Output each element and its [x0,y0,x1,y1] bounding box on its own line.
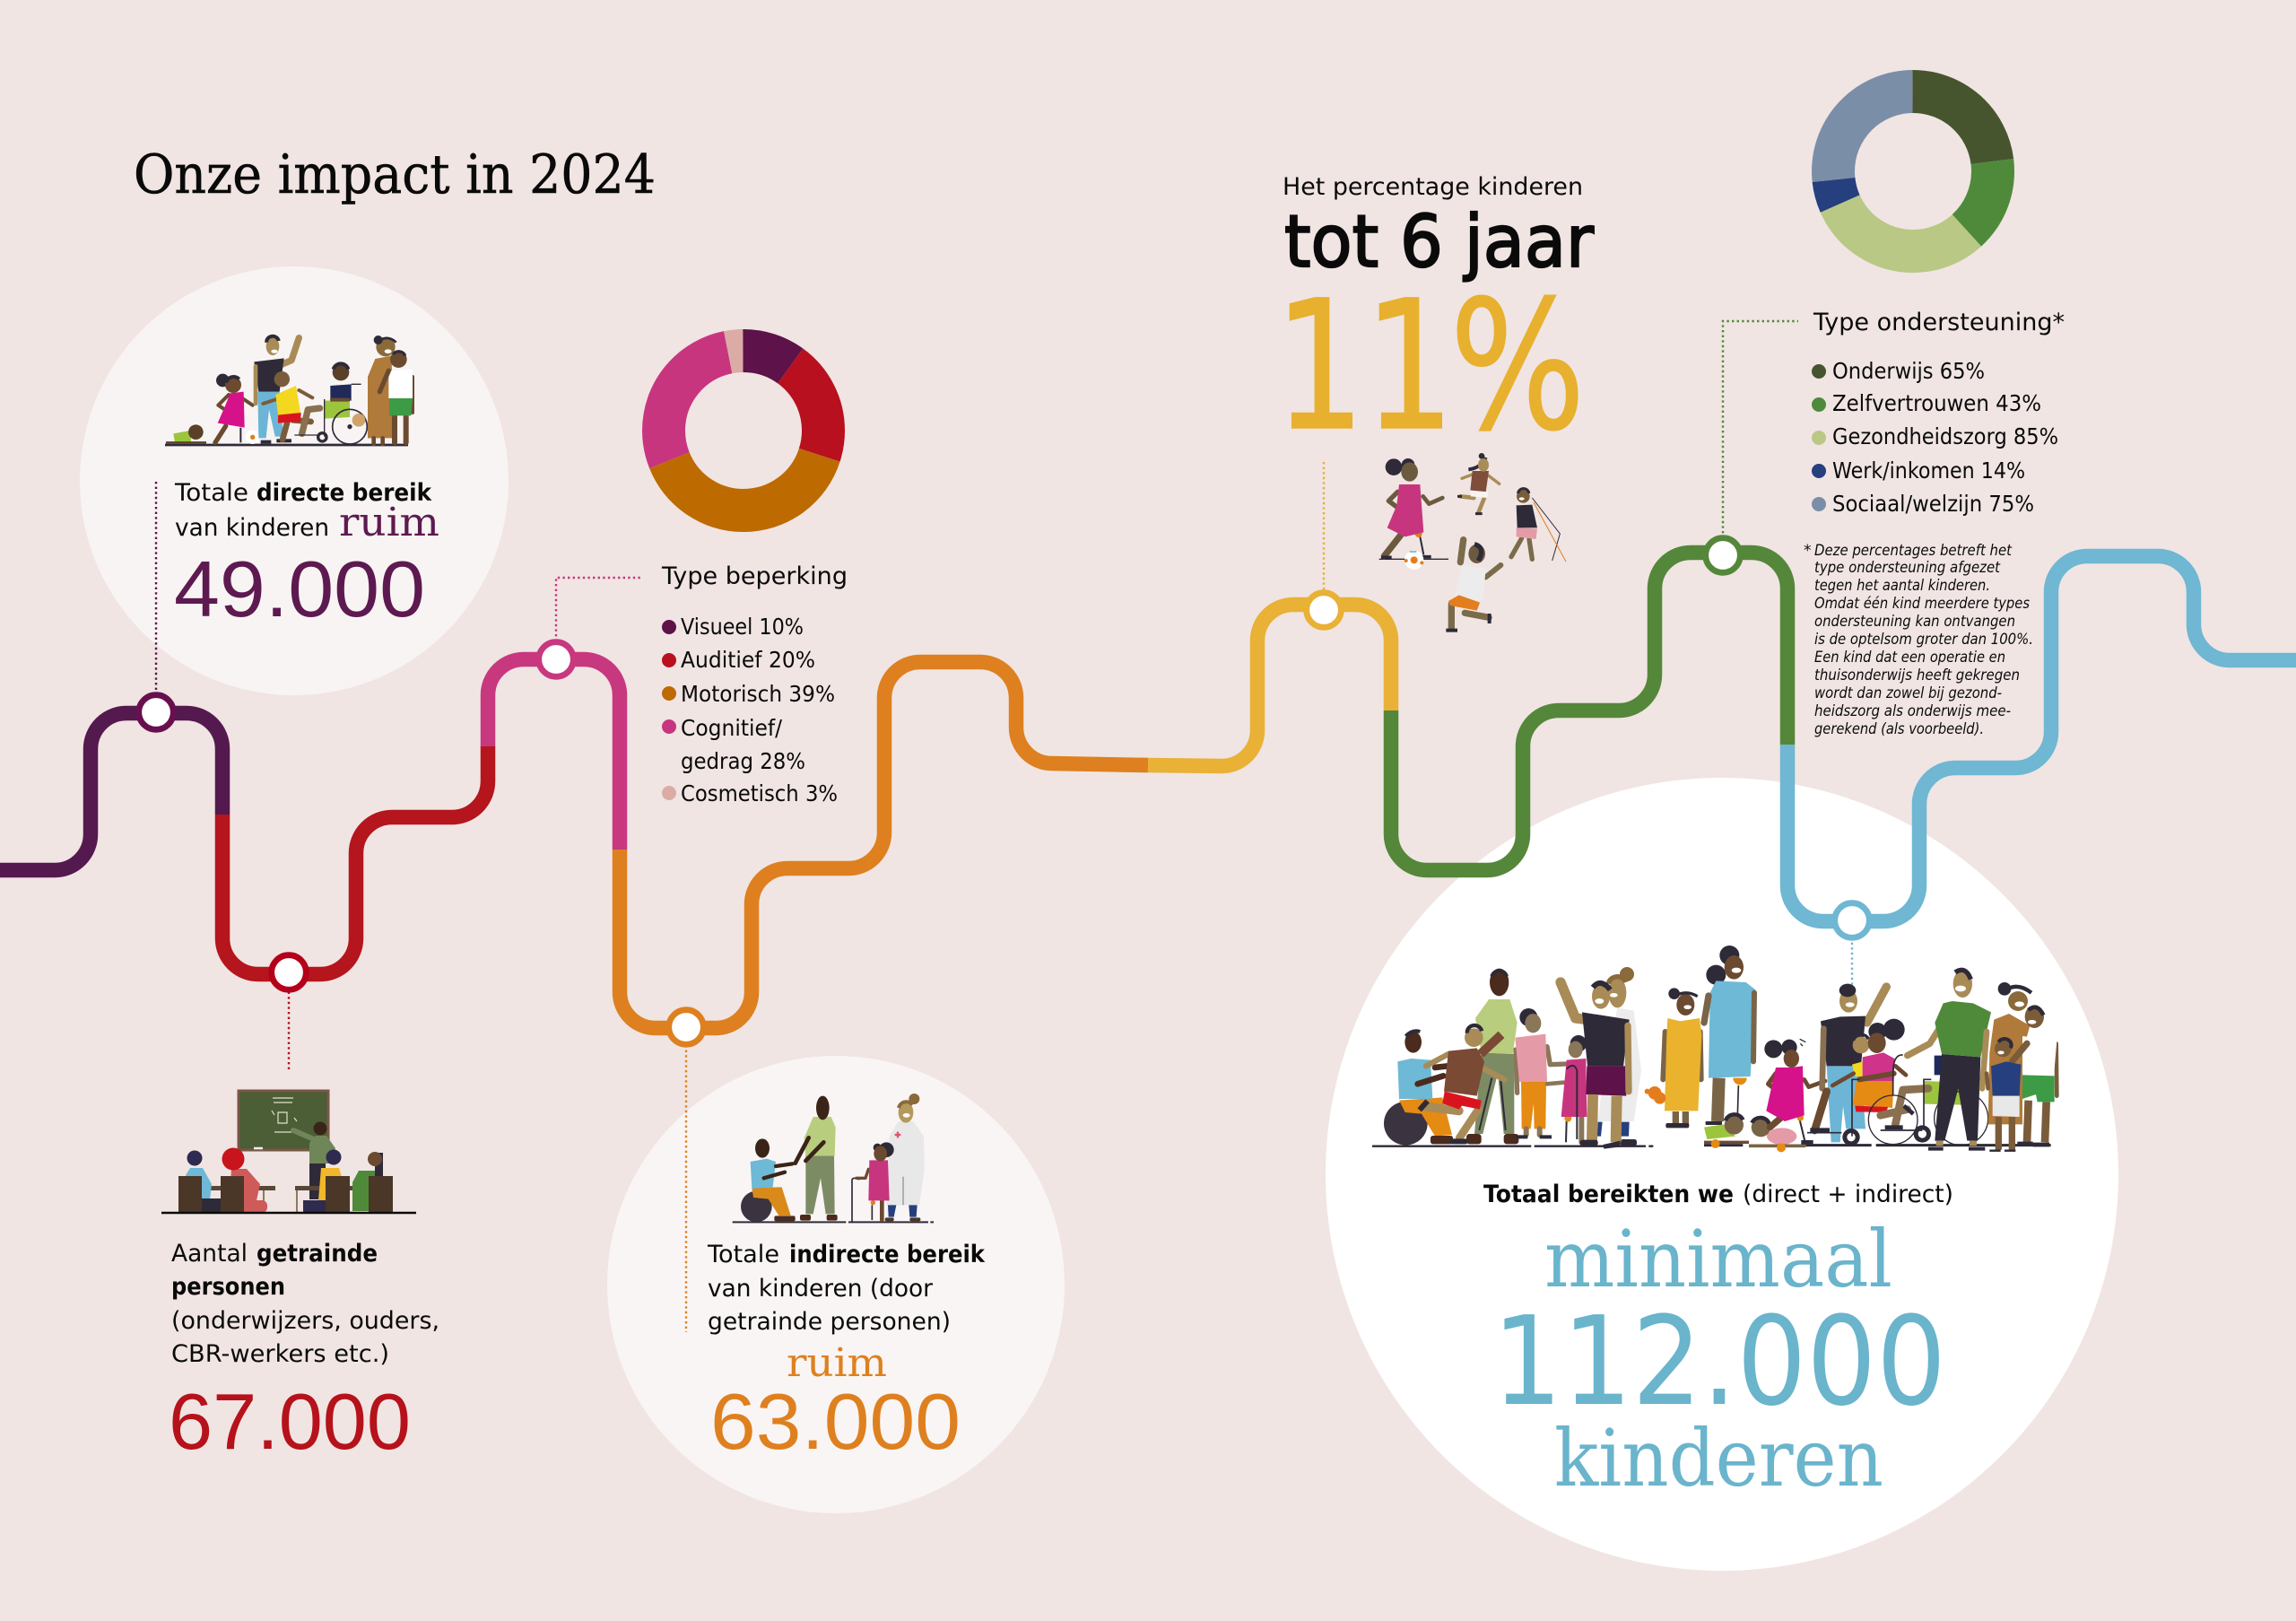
text block: indirect reach: getrainde personen) [708,1308,951,1336]
legend: type ondersteuning: Onderwijs 65% [1832,358,1985,384]
footnote: type ondersteuning afgezet [1814,559,2001,577]
footnote: tegen het aantal kinderen. [1814,577,1990,595]
text block: trained persons [169,1240,439,1466]
track segment: pink [488,659,620,850]
text block: trained persons: 67.000 [169,1377,411,1466]
crowd: left group [1372,967,1701,1149]
track segment: yellow [1148,605,1391,766]
track segment: orange [620,662,1148,1028]
illustration: classroom [161,1091,416,1213]
track segment: green [1391,553,1787,870]
footnote: ondersteuning kan ontvangen [1814,613,2015,631]
illustration: caregivers [733,1094,934,1222]
legend: type ondersteuning: Sociaal/welzijn 75% [1832,491,2034,517]
illustration: playing children [1379,453,1566,631]
footnote: thuisonderwijs heeft gekregen [1814,667,2020,684]
text block: indirect reach [707,1241,986,1466]
legend: type beperking: Cosmetisch 3% [681,780,838,806]
text block: trained persons: personen [171,1273,285,1301]
track segment: purple [0,713,222,870]
text block: total reach: minimaal [1544,1213,1892,1305]
legend: type beperking [661,562,848,806]
dotted leader lines [156,321,1852,1332]
illustration: family with wheelchair [165,336,413,445]
legend: type ondersteuning: Zelfvertrouwen 43% [1832,390,2041,416]
text block: direct reach: 49.000 [174,545,425,633]
text block: direct reach: directe bereik [257,479,432,507]
footnote: Omdat één kind meerdere types [1814,595,2030,613]
footnote: Een kind dat een operatie en [1814,649,2005,667]
legend: type ondersteuning: Type ondersteuning* [1813,309,2065,336]
footnote: * [1804,542,1812,560]
text block: trained persons: CBR-werkers etc.) [171,1340,389,1368]
legend: type ondersteuning [1812,309,2065,517]
text block: under six heading [1274,173,1594,470]
legend: type beperking: Auditief 20% [681,647,815,673]
text block: indirect reach: Totale [707,1241,779,1268]
footnote: wordt dan zowel bij gezond- [1814,684,2002,702]
legend: type beperking: gedrag 28% [681,748,805,774]
footnote: Deze percentages betreft het [1814,542,2013,560]
text block: indirect reach: ruim [787,1340,887,1386]
legend: type ondersteuning: Gezondheidszorg 85% [1832,423,2058,449]
footnote: gerekend (als voorbeeld). [1814,720,1984,738]
legend: type beperking: Visueel 10% [681,614,804,640]
text block: indirect reach: indirecte bereik [789,1241,986,1268]
footnote [1804,542,2033,738]
illustration: crowd of people [1372,946,2057,1152]
footnote: is de optelsom groter dan 100%. [1814,631,2033,649]
legend: type beperking: Cognitief/ [681,715,783,741]
legend: type ondersteuning: Werk/inkomen 14% [1832,458,2025,484]
text block: total reach: Totaal bereikten we [1483,1181,1734,1208]
text block: direct reach [174,479,439,633]
text block: total reach: kinderen [1554,1412,1883,1504]
text block: direct reach: ruim [339,500,439,545]
legend: type beperking: Motorisch 39% [681,681,835,707]
text block: total reach [1483,1181,1953,1504]
text block: trained persons: (onderwijzers, ouders, [171,1307,439,1335]
text block: total reach: 112.000 [1492,1291,1946,1434]
text block: under six heading: 11% [1274,264,1586,470]
text block: indirect reach: 63.000 [710,1377,961,1466]
text block: direct reach: van kinderen [175,514,329,542]
panel circle: direct reach [80,266,509,695]
illustration: donut type ondersteuning [1833,92,1993,251]
track segment: red [222,746,488,974]
panel circle: indirect reach [607,1056,1065,1513]
track segment: blue [1787,556,2296,921]
panel circle: total reach [1326,778,2118,1571]
text block: under six heading: tot 6 jaar [1284,200,1594,283]
text block: under six heading: Het percentage kinderen [1283,173,1583,201]
track nodes [139,538,1869,1044]
text block: trained persons: getrainde [257,1240,378,1268]
text block: direct reach: Totale [174,479,248,507]
winding track line [0,553,2296,1028]
text block: total reach: (direct + indirect) [1743,1181,1953,1208]
illustration: donut type beperking [664,351,823,510]
text block: indirect reach: van kinderen (door [708,1275,934,1303]
text block: trained persons: Aantal [171,1240,248,1268]
title: Onze impact in 2024 [134,144,656,206]
legend: type beperking: Type beperking [661,562,848,590]
footnote: heidszorg als onderwijs mee- [1814,702,2011,720]
crowd: right group [1704,946,2057,1152]
